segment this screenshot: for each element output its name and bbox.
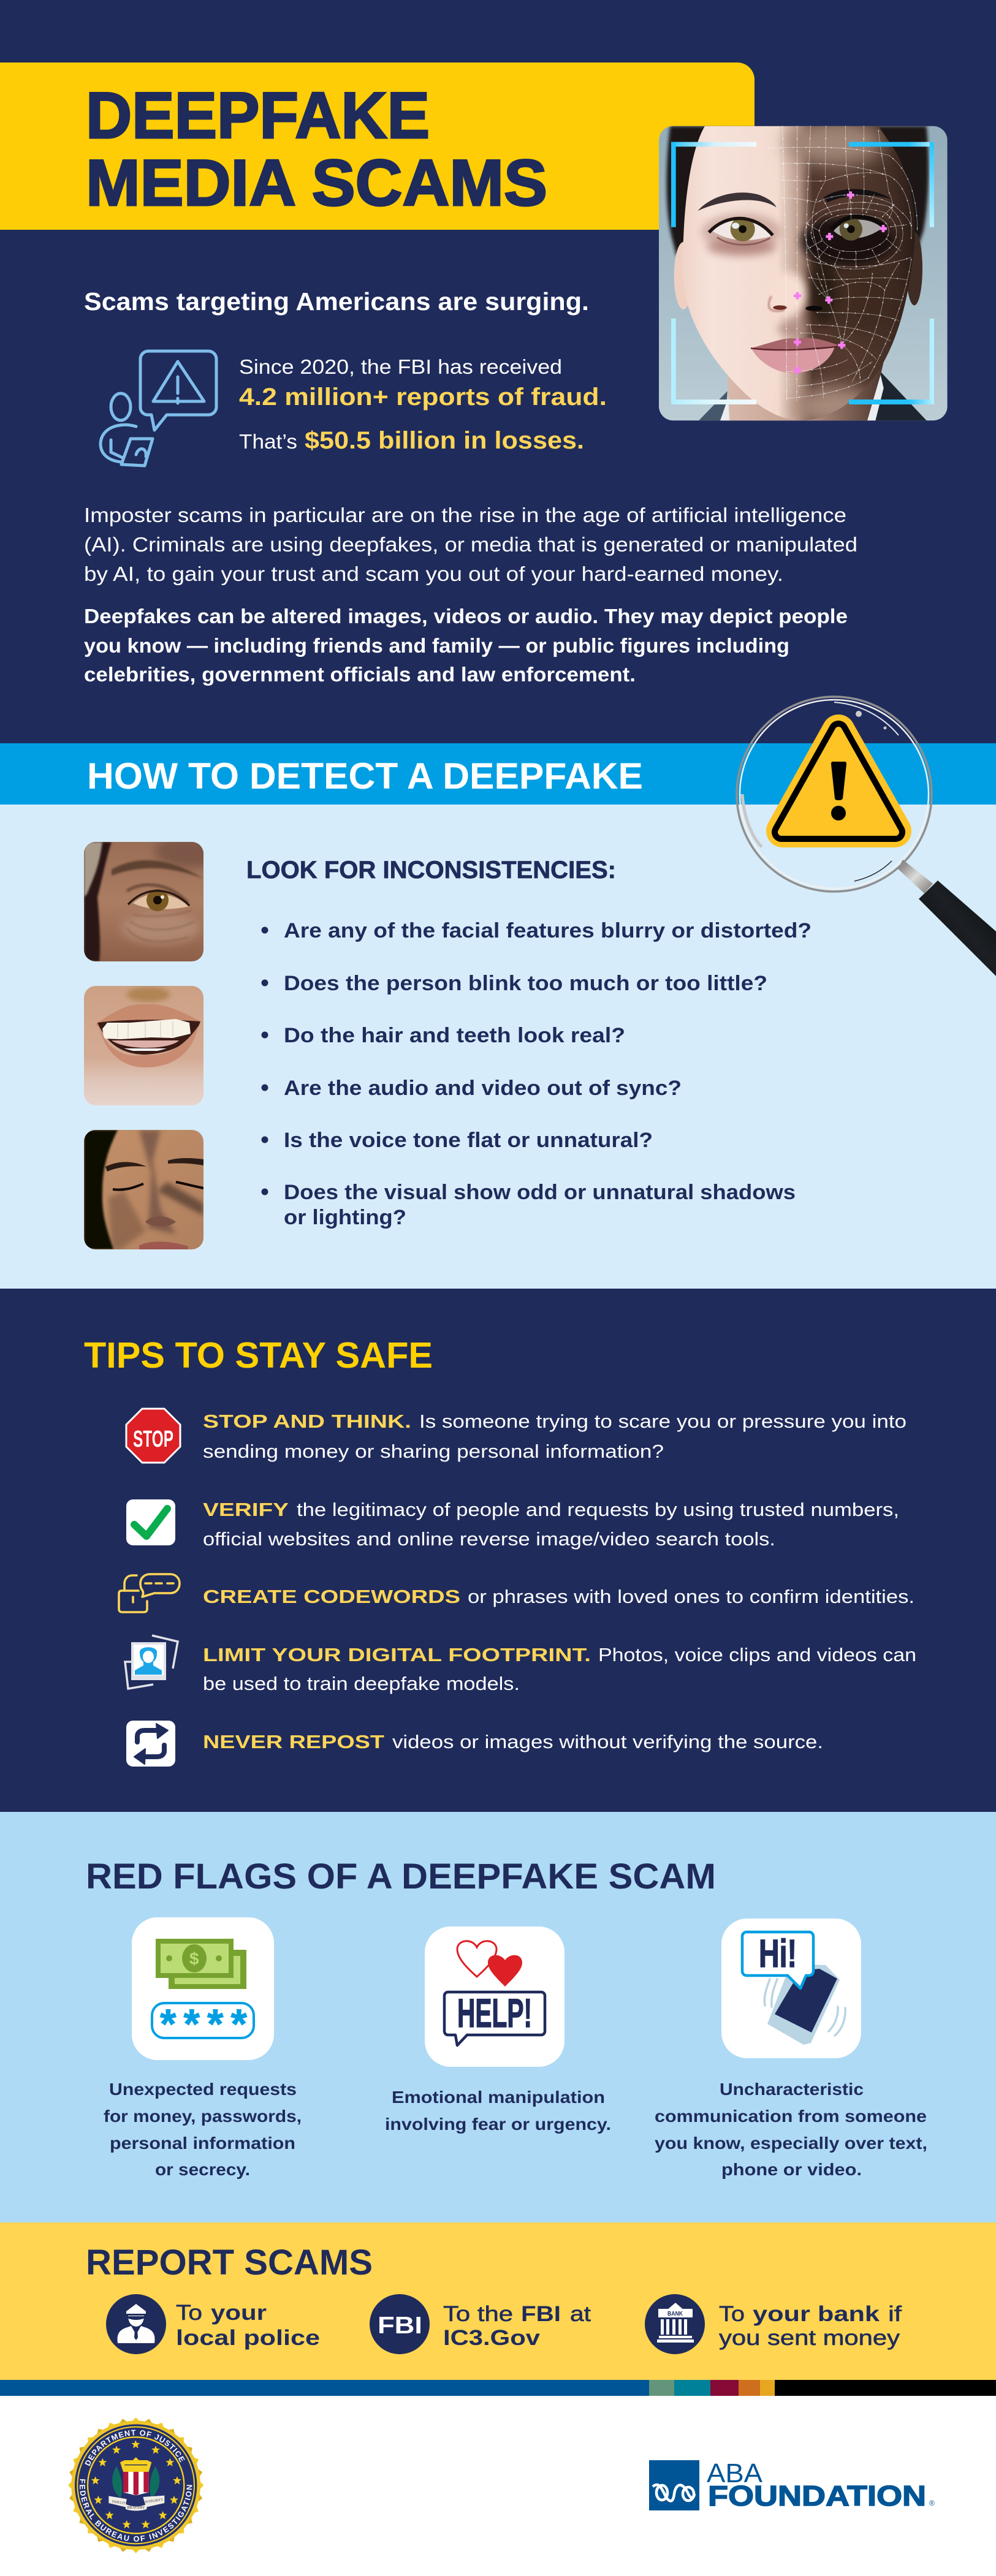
statistic text [239,355,607,454]
section banner: HOW TO DETECT A DEEPFAKE [87,756,643,797]
eyes [712,220,771,240]
checklist [261,919,812,1229]
tip: create codewords [203,1586,914,1607]
panel: header and intro [0,0,996,743]
report: FBI: To the [443,2302,513,2326]
seal lettering: FEDERAL BUREAU OF INVESTIGATION [80,2479,192,2542]
statistic text: $50.5 billion in losses. [305,427,584,454]
tip: verify: VERIFY [203,1499,289,1520]
tip: verify [203,1499,899,1550]
caption: phone or video. [721,2160,862,2179]
icon: stop sign [126,1409,180,1463]
report: your bank: your bank [753,2302,880,2326]
statistic text: That’s [239,430,297,453]
heading: look for inconsistencies: LOOK FOR INCONSISTENCIES: [246,857,616,884]
icon: hi speech bubble: Hi! [759,1931,797,1976]
icon: police officer [106,2294,166,2354]
bold paragraph: you know — including friends and family — or public figures including [84,634,789,657]
tip: create codewords: CREATE CODEWORDS [203,1586,460,1607]
tip: limit your digital footprint: be used to train deepfake models. [203,1673,520,1694]
report: your bank: if [888,2302,902,2326]
checklist: Do the hair and teeth look real? [284,1024,625,1047]
icon: check mark [126,1499,175,1545]
heading: REPORT SCAMS [86,2243,373,2282]
report: your bank [719,2302,902,2350]
logo mark [653,2485,694,2501]
lips [751,338,841,349]
checklist: Are any of the facial features blurry or distorted? [284,919,812,942]
caption: or secrecy. [155,2160,250,2179]
report: local police: To [176,2301,202,2325]
handle [898,860,996,976]
report: your bank: To [719,2302,745,2326]
caption [385,2088,611,2134]
panel: red flags [0,1812,996,2222]
caption: personal information [110,2134,295,2153]
icon: phone [764,1964,845,2045]
icon: cash [156,1939,246,1989]
panel: how to detect a deepfake [0,743,996,1289]
heading: RED FLAGS OF A DEEPFAKE SCAM [86,1857,716,1896]
icon: stacked photos [125,1635,178,1689]
caption: for money, passwords, [104,2107,302,2126]
face scan photo [659,121,948,427]
bold paragraph: celebrities, government officials and law enforcement. [84,663,636,686]
bold paragraph [84,605,848,686]
tip: stop and think [203,1411,907,1462]
seal scrolls: INTEGRITY [145,2498,164,2504]
icon: help speech bubble [444,1990,545,2045]
tip: verify: the legitimacy of people and requests by using trusted numbers, [297,1499,899,1520]
face [683,126,914,420]
report: local police: local police [176,2326,320,2350]
logo: ABA Foundation [649,2458,935,2512]
caption [655,2080,927,2179]
seal laurels [112,2466,159,2498]
eyebrows [698,192,777,211]
tip: limit your digital footprint: LIMIT YOUR DIGITAL FOOTPRINT. [203,1644,591,1665]
statistic text: 4.2 million+ reports of fraud. [239,384,607,411]
card: uncharacteristic communication [655,1919,927,2179]
icon: help speech bubble: HELP! [457,1990,532,2036]
report: FBI: FBI [521,2302,561,2326]
logo: ABA Foundation: ABA [707,2458,763,2488]
tip: never repost [203,1731,823,1752]
intro paragraph [84,504,857,585]
caption: you know, especially over text, [655,2134,927,2153]
title: MEDIA SCAMS [86,146,547,219]
icon: cash: $ [189,1949,199,1968]
icon: repost arrows [126,1721,175,1767]
report: FBI: IC3.Gov [443,2326,541,2350]
tip: verify: official websites and online reverse image/video search tools. [203,1528,775,1550]
seal lettering: DEPARTMENT OF JUSTICE [85,2430,185,2466]
intro paragraph: Imposter scams in particular are on the rise in the age of artificial intelligence [84,504,846,526]
tip: create codewords: or phrases with loved ones to confirm identities. [468,1586,914,1607]
logo: FBI seal [68,2417,203,2553]
seal scrolls [108,2496,164,2510]
panel: report scams [0,2222,996,2380]
tip: stop and think: STOP AND THINK. [203,1411,411,1432]
icon: hearts [457,1941,522,1987]
icon: bank: BANK [667,2311,683,2317]
subheading: Scams targeting Americans are surging. [84,287,589,316]
card: money and password [104,1917,302,2179]
photo: mouth [84,986,203,1105]
title banner [0,63,755,230]
caption: Uncharacteristic [720,2080,864,2099]
tip: limit your digital footprint: Photos, voice clips and videos can [598,1644,916,1665]
section banner [0,743,996,805]
tip: stop and think: Is someone trying to scare you or pressure you into [419,1411,907,1432]
face mesh [768,126,918,401]
panel: tips to stay safe [0,1289,996,1812]
warning triangle [781,730,895,832]
magnifying glass with warning sign [737,697,996,976]
logo: ABA Foundation: ® [929,2499,935,2507]
tracking markers [794,191,887,374]
checklist: Are the audio and video out of sync? [284,1077,682,1100]
icon: person with warning speech bubble [101,351,216,466]
tip: stop and think: sending money or sharing personal information? [203,1441,664,1462]
icon: password field: **** [160,2001,248,2047]
statistic text: Since 2020, the FBI has received [239,355,562,378]
caption: Emotional manipulation [392,2088,605,2107]
icon: bank [645,2294,705,2354]
icon: stop sign: STOP [133,1426,173,1452]
seal stars [91,2440,181,2528]
icon: hi speech bubble [742,1931,813,1988]
checklist: Is the voice tone flat or unnatural? [284,1129,653,1152]
report: FBI [443,2302,591,2350]
logo: ABA Foundation: FOUNDATION [708,2480,926,2512]
checklist: Does the person blink too much or too little? [284,972,767,995]
lens rim [737,697,932,892]
report: local police [176,2301,320,2350]
icon: FBI badge: FBI [378,2313,422,2339]
intro paragraph: by AI, to gain your trust and scam you out of your hard-earned money. [84,563,783,585]
intro paragraph: (AI). Criminals are using deepfakes, or media that is generated or manipulated [84,533,857,556]
seal lettering [80,2430,192,2542]
report: FBI: at [570,2302,591,2326]
tip: never repost: videos or images without verifying the source. [392,1731,823,1752]
report: local police: your [211,2301,267,2325]
checklist: Does the visual show odd or unnatural shadows [284,1181,796,1204]
caption: Unexpected requests [109,2080,297,2099]
caption: communication from someone [655,2107,927,2126]
caption: involving fear or urgency. [385,2115,611,2134]
caption [104,2080,302,2179]
bold paragraph: Deepfakes can be altered images, videos or audio. They may depict people [84,605,848,627]
icon: lock and speech bubble [119,1574,180,1612]
card: emotional manipulation [385,1926,611,2134]
photo: face with shadows [84,1130,203,1249]
color band [0,2380,996,2396]
icon: FBI badge [370,2294,430,2354]
report: your bank: you sent money [719,2326,900,2350]
title: DEEPFAKE [86,78,430,152]
heading: TIPS TO STAY SAFE [84,1335,433,1376]
photo: eye [84,842,203,961]
tip: limit your digital footprint [203,1644,916,1694]
title [86,78,547,219]
tip: never repost: NEVER REPOST [203,1731,384,1752]
scan brackets [671,142,934,404]
seal scrolls: FIDELITY [112,2500,127,2506]
seal scrolls: BRAVERY [127,2506,145,2510]
checklist: or lighting? [284,1206,406,1229]
seal shield [120,2457,151,2496]
